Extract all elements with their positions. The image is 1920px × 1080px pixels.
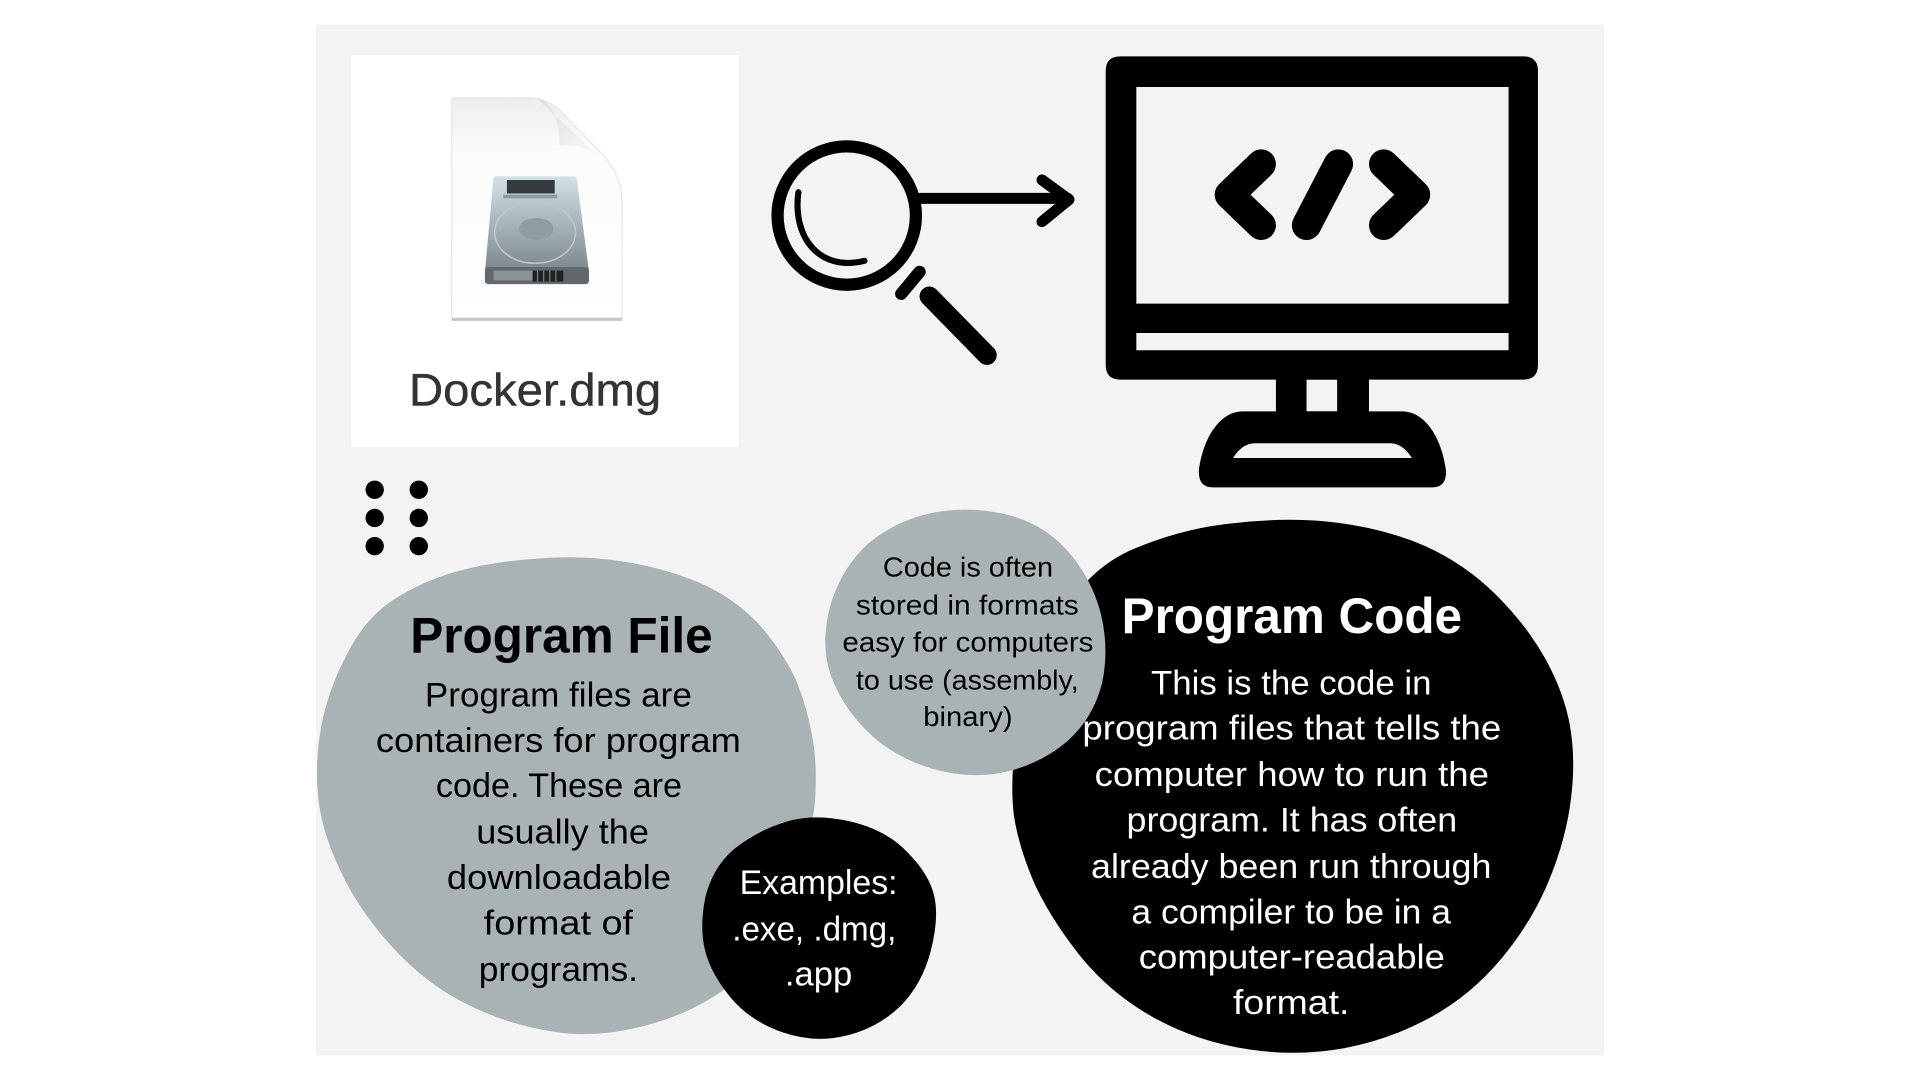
panel: Program File — [317, 557, 816, 1034]
body text: Program File — [376, 677, 741, 989]
arrow: magnifier to computer — [921, 180, 1069, 222]
body text: Program Code: a compiler to be in a — [1131, 893, 1452, 931]
callout: Examples — [702, 817, 936, 1039]
icon: code brackets — [1229, 164, 1416, 225]
background panel — [316, 24, 1604, 1056]
body text: Program Code: computer-readable — [1139, 939, 1445, 977]
body text: Program File: containers for program — [376, 722, 741, 760]
icon: hard drive — [485, 176, 589, 284]
body text: Program File: Program files are — [425, 677, 692, 715]
callout: code formats — [825, 510, 1105, 775]
icon: computer monitor with code symbol — [1106, 56, 1538, 487]
callout text: code formats: to use (assembly, — [856, 664, 1079, 695]
body text: Program File: code. These are — [436, 767, 682, 805]
panel: Docker.dmg file screenshot — [351, 55, 738, 447]
heading: Program File: Program File — [410, 608, 713, 664]
callout text: code formats: easy for computers — [842, 626, 1093, 657]
callout text: Examples: .exe, .dmg, — [732, 910, 896, 948]
body text: Program Code: computer how to run the — [1095, 756, 1489, 794]
body text: Program Code — [1082, 664, 1501, 1022]
file name label: Docker.dmg — [409, 364, 661, 415]
body text: Program Code: This is the code in — [1151, 664, 1431, 702]
body text: Program File: downloadable — [447, 859, 671, 897]
panel: Program Code — [1012, 520, 1573, 1053]
icon: document page with folded corner — [452, 98, 622, 321]
decorative six dots — [366, 481, 428, 555]
body text: Program Code: program. It has often — [1127, 801, 1457, 839]
callout text: code formats: stored in formats — [856, 590, 1079, 621]
heading: Program Code: Program Code — [1122, 588, 1462, 644]
body text: Program File: programs. — [479, 951, 638, 989]
callout text: code formats: Code is often — [883, 552, 1053, 583]
callout text: Examples — [732, 864, 898, 994]
body text: Program File: usually the — [476, 814, 649, 852]
icon: magnifying glass — [778, 146, 987, 355]
callout text: code formats — [842, 552, 1093, 732]
body text: Program Code: program files that tells the — [1082, 710, 1501, 748]
callout text: Examples: Examples: — [740, 864, 898, 902]
body text: Program Code: format. — [1233, 984, 1349, 1022]
body text: Program File: format of — [484, 904, 634, 942]
callout text: code formats: binary) — [923, 701, 1013, 732]
callout text: Examples: .app — [785, 956, 852, 994]
body text: Program Code: already been run through — [1091, 848, 1491, 886]
